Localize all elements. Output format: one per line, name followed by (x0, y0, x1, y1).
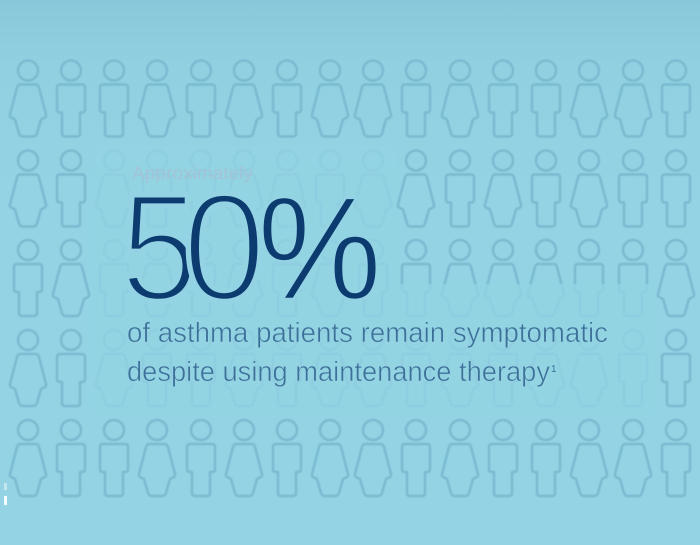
big number: 50%: 5 (120, 162, 199, 333)
statement line 2: despite using maintenance therapy (127, 356, 550, 387)
people row 2 (10, 150, 690, 226)
people row 4 (10, 330, 690, 406)
fade panel behind text (94, 146, 655, 412)
people row 3 (14, 240, 694, 316)
people row 5 (10, 420, 690, 496)
people row 1 (10, 60, 690, 136)
big number: 50%: % (258, 167, 382, 331)
big number: 50% (120, 162, 382, 333)
statement line 1: of asthma patients remain symptomatic (127, 317, 608, 348)
white edge marks (4, 483, 7, 505)
small label: Approximately: Approximately (132, 163, 253, 183)
footnote reference 1: 1 (551, 364, 557, 375)
big number: 50%: 0 (182, 162, 266, 333)
